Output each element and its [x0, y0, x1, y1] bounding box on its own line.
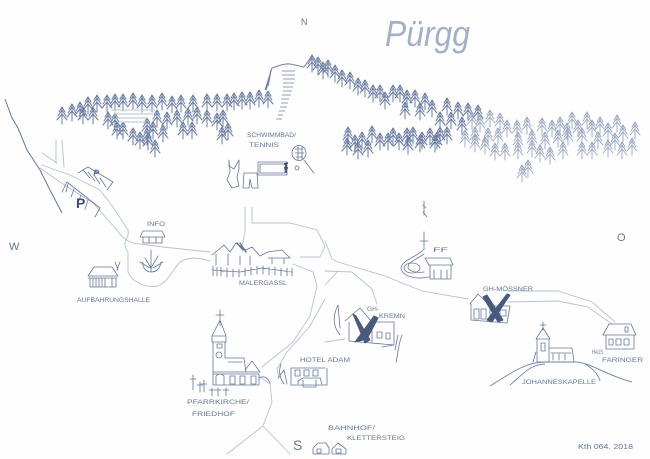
- title: Pürgg: [385, 13, 470, 54]
- river: [5, 99, 62, 213]
- building: Aufbahrungshalle: [88, 262, 120, 287]
- building group: Malergassl: [212, 243, 292, 277]
- forest: ridge: [307, 55, 483, 134]
- forest: east block: [460, 110, 640, 182]
- label: Bahnhof Klettersteig: KLETTERSTEIG: [347, 435, 405, 442]
- church spire and loop: [401, 201, 429, 278]
- hill: [490, 362, 632, 386]
- building: Bahnhof: [313, 443, 346, 454]
- label: Haus Faringer: HAUS: [592, 349, 603, 356]
- label: Aufbahrungshalle: AUFBAHRUNGSHALLE: [77, 297, 151, 304]
- compass west: W: [9, 241, 20, 253]
- building: FF fire station: [425, 247, 453, 279]
- fence: [212, 266, 292, 277]
- label: Haus Faringer: FARINGER: [602, 357, 643, 364]
- parking: upper: [78, 167, 113, 190]
- icon: crossed cutlery Kremn: [353, 314, 378, 343]
- compass north: N: [301, 17, 308, 27]
- swimming and tennis label: SCHWIMMBAD/: [247, 132, 296, 139]
- forest: lower strip: [342, 126, 452, 159]
- label: FF: FF: [433, 247, 448, 254]
- parking letter upper: P: [93, 168, 100, 178]
- swimming and tennis label: [247, 132, 296, 149]
- label: Pfarrkirche: [187, 399, 249, 418]
- swimming and tennis label: TENNIS: [249, 142, 280, 149]
- building: Pfarrkirche: [212, 310, 270, 385]
- forest: left slope: [57, 90, 273, 157]
- icon: swim trunks: [243, 173, 258, 188]
- building: info hut: [140, 221, 165, 243]
- building: Hotel Adam: [278, 364, 327, 387]
- icon: swimmer: [284, 163, 288, 173]
- label: GH Kremn: KREMN: [379, 313, 405, 320]
- parking: lower: [62, 182, 100, 217]
- building: Haus Faringer: [603, 324, 636, 349]
- icon: pool: [258, 162, 287, 175]
- label: GH Mössner: GH-MÖSSNER: [483, 285, 533, 293]
- icon: graveyard crosses: [190, 375, 229, 396]
- label: GH Kremn: [367, 306, 405, 320]
- label: Malergassl: MALERGASSL: [239, 280, 287, 287]
- label: Bahnhof Klettersteig: [328, 425, 405, 442]
- label: Pfarrkirche: PFARRKIRCHE/: [187, 399, 249, 406]
- label: Haus Faringer: [592, 349, 643, 364]
- compass east: O: [617, 232, 626, 244]
- icon: crossed cutlery Mössner: [483, 294, 510, 322]
- icon: plant roundabout: [140, 250, 163, 272]
- parking letter lower: P: [76, 195, 85, 211]
- label: GH Kremn: GH-: [367, 306, 379, 313]
- label: Johanneskapelle: JOHANNESKAPELLE: [522, 379, 597, 386]
- label: Bahnhof Klettersteig: BAHNHOF/: [328, 425, 375, 432]
- icon: tennis racket and ball: [292, 146, 314, 173]
- roads: [40, 140, 615, 454]
- label: info: INFO: [147, 221, 165, 228]
- building: GH Kremn: [334, 305, 402, 362]
- compass south: S: [293, 437, 302, 453]
- building: GH Mössner: [470, 294, 510, 323]
- building: Johanneskapelle: [533, 322, 574, 362]
- label: Hotel Adam: HOTEL ADAM: [300, 357, 350, 364]
- label: Pfarrkirche: FRIEDHOF: [192, 411, 235, 418]
- mountain cliff: [265, 56, 312, 119]
- icon: swimsuit: [227, 160, 239, 188]
- signature: Kth 064. 2018: [578, 444, 633, 451]
